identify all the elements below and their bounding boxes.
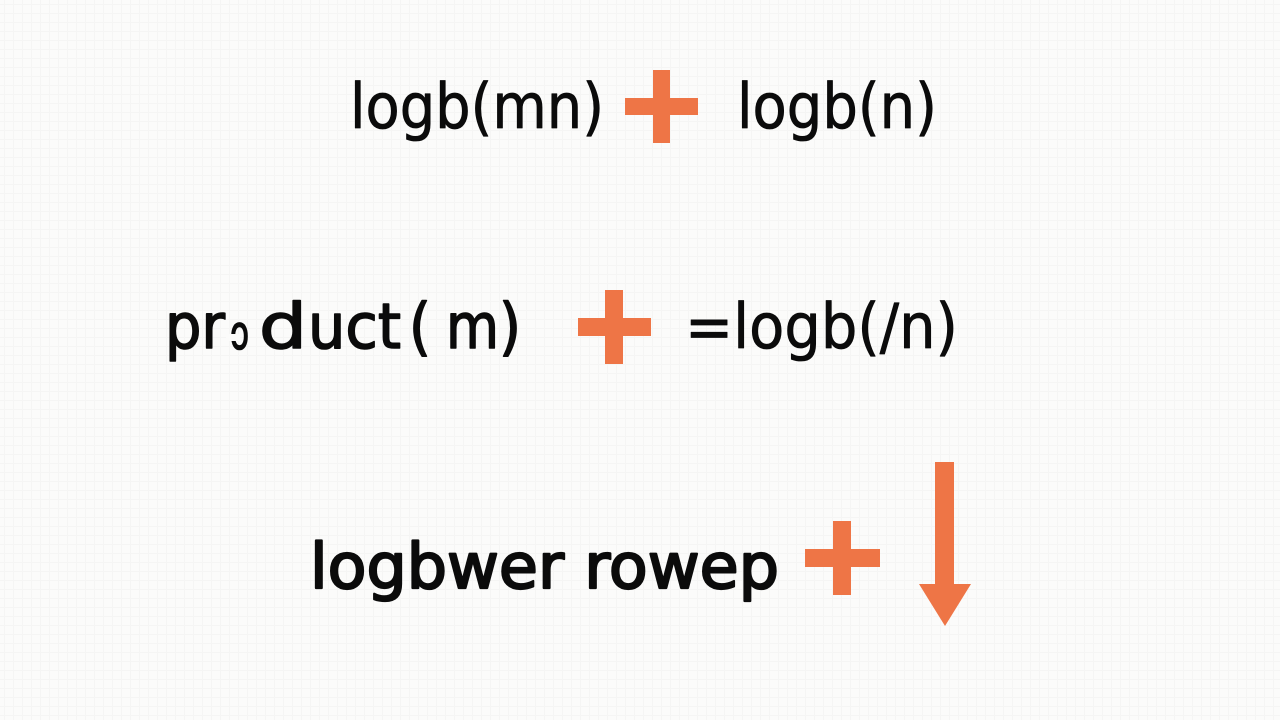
icon: plus 3 — [805, 521, 880, 595]
row 3: power formula — [310, 462, 971, 626]
text: product ( m): ( — [409, 290, 431, 363]
text: product ( m): d — [259, 290, 307, 363]
text: product ( m) — [165, 290, 521, 363]
text: product ( m): m — [446, 290, 499, 363]
arrow: down — [919, 462, 971, 626]
text: logb(n): logb(n) — [737, 70, 937, 143]
text: =logb(/n): =logb(/n) — [685, 290, 958, 363]
text: logbwer rowep: logbwer rowep — [310, 530, 779, 603]
text: product ( m): uct — [308, 290, 401, 363]
text: product ( m): ) — [499, 290, 521, 363]
row 1: log formula — [350, 70, 937, 143]
icon: plus 1 — [625, 70, 698, 143]
text: product ( m): pr — [165, 290, 225, 363]
icon: plus 2 — [578, 290, 651, 364]
row 2: product formula — [165, 290, 958, 364]
text: logb(mn): logb(mn) — [350, 70, 604, 143]
text: product ( m): o — [230, 306, 249, 360]
